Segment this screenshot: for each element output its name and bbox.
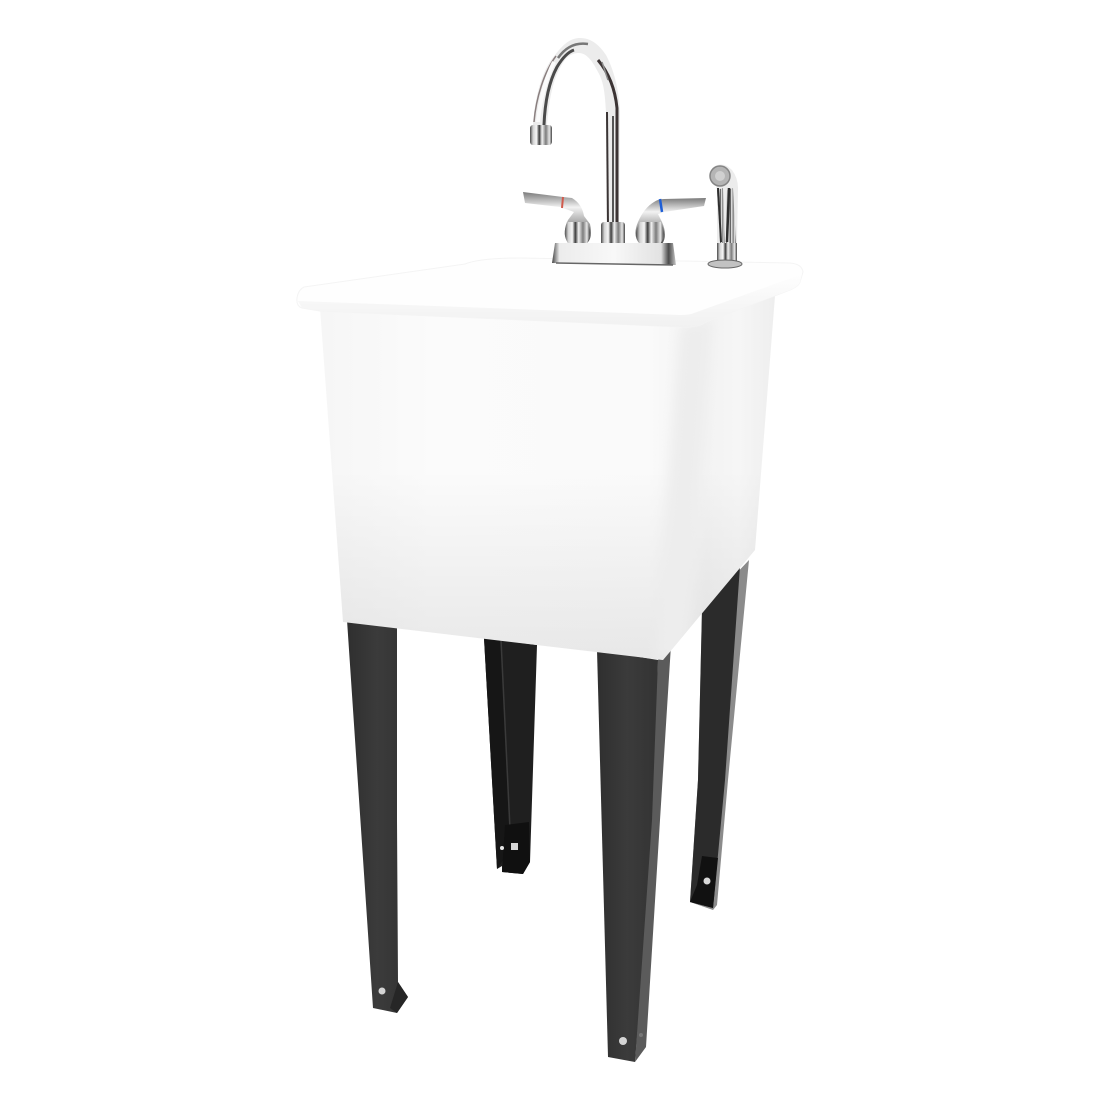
tub body <box>320 296 775 660</box>
left handle (hot) <box>523 192 591 243</box>
product illustration: utility sink <box>296 38 804 1062</box>
spout nozzle <box>530 125 552 145</box>
centre column <box>601 222 625 246</box>
back right leg <box>690 560 749 910</box>
side sprayer <box>708 164 742 268</box>
base plate <box>552 243 676 265</box>
gooseneck spout <box>533 38 620 228</box>
front right leg <box>597 645 671 1062</box>
back left leg <box>484 638 537 874</box>
front left leg <box>347 620 408 1013</box>
tub rim <box>297 258 803 327</box>
right handle (cold) <box>635 198 706 244</box>
faucet <box>523 38 706 265</box>
tub <box>297 258 803 660</box>
